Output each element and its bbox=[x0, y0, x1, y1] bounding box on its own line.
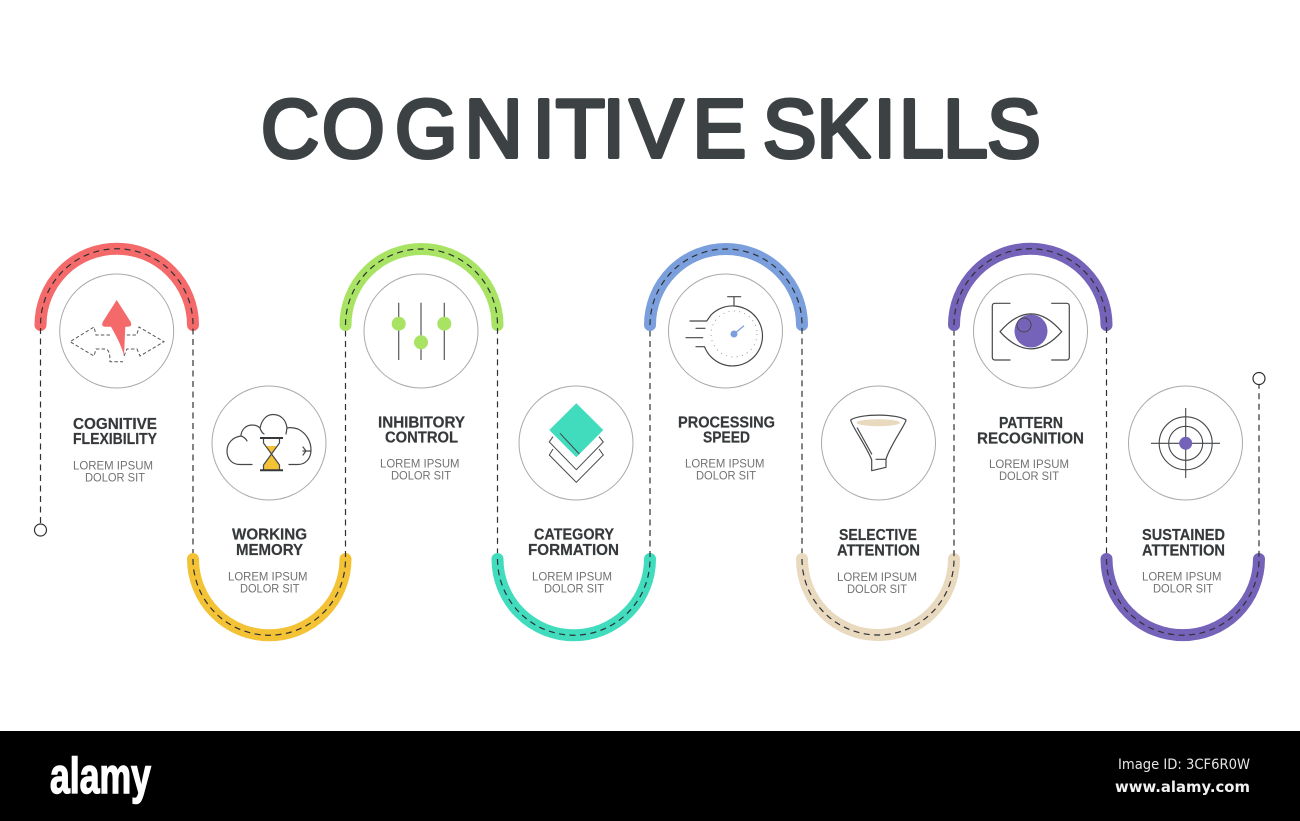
panel: working memory: DOLOR SIT bbox=[240, 582, 300, 596]
dashed path bbox=[802, 325, 954, 635]
connector arc: red bbox=[40, 249, 193, 325]
body text: LOREM IPSUM bbox=[73, 458, 153, 472]
panel: sustained attention bbox=[1106, 385, 1259, 635]
panel: inhibitory control: CONTROL bbox=[385, 430, 458, 446]
connector arc: purple bbox=[954, 249, 1106, 325]
footer bar bbox=[0, 731, 1300, 821]
icon: target bbox=[1151, 408, 1220, 478]
heading: SELECTIVE bbox=[839, 527, 917, 544]
panel: cognitive flexibility bbox=[40, 249, 193, 559]
body text: LOREM IPSUM bbox=[837, 570, 917, 584]
title: COGNITIVE SKILLS bbox=[261, 83, 1041, 175]
panel: processing speed: SPEED bbox=[703, 430, 750, 446]
icon: diverging arrows bbox=[70, 300, 164, 362]
icon: funnel bbox=[851, 415, 906, 471]
icon: cloud with hourglass bbox=[227, 414, 311, 470]
icon circle bbox=[212, 386, 326, 500]
panel: category formation: FORMATION bbox=[528, 542, 619, 559]
panel: working memory bbox=[193, 325, 346, 635]
panel: pattern recognition: RECOGNITION bbox=[977, 430, 1084, 448]
end marker bbox=[1253, 372, 1265, 384]
body text: LOREM IPSUM bbox=[380, 456, 460, 470]
panel: inhibitory control bbox=[346, 249, 498, 559]
panel: category formation: DOLOR SIT bbox=[544, 582, 605, 596]
dashed path bbox=[650, 249, 802, 559]
connector arc: purple bbox=[1106, 559, 1259, 635]
panel: pattern recognition bbox=[954, 249, 1106, 559]
footer logo: alamy bbox=[50, 748, 151, 804]
panel: cognitive flexibility: FLEXIBILITY bbox=[73, 431, 157, 448]
icon: sliders bbox=[392, 303, 451, 360]
icon circle bbox=[60, 274, 174, 388]
connector arc: blue bbox=[650, 249, 802, 325]
panel: selective attention: DOLOR SIT bbox=[847, 582, 908, 596]
body text: LOREM IPSUM bbox=[685, 456, 764, 470]
icon circle bbox=[1128, 386, 1242, 500]
dashed path bbox=[498, 325, 650, 635]
panel: cognitive flexibility: DOLOR SIT bbox=[85, 470, 146, 484]
dashed path bbox=[1106, 385, 1259, 635]
dashed path bbox=[954, 249, 1106, 559]
body text: LOREM IPSUM bbox=[989, 457, 1069, 471]
heading: PATTERN bbox=[999, 415, 1063, 432]
icon circle bbox=[668, 274, 782, 388]
dashed path bbox=[40, 249, 193, 559]
connector arc: teal bbox=[498, 559, 650, 635]
connector arc: green bbox=[346, 249, 498, 325]
body text: LOREM IPSUM bbox=[228, 570, 308, 584]
heading: CATEGORY bbox=[534, 526, 614, 544]
icon circle bbox=[974, 274, 1088, 388]
panel: processing speed: DOLOR SIT bbox=[696, 468, 757, 482]
start marker bbox=[34, 524, 46, 536]
panel: sustained attention: DOLOR SIT bbox=[1153, 582, 1214, 596]
icon circle bbox=[822, 386, 936, 500]
heading: WORKING bbox=[232, 526, 307, 544]
image id: Image ID: 3CF6R0W bbox=[1118, 757, 1250, 773]
heading: SUSTAINED bbox=[1142, 527, 1225, 544]
connector arc: beige bbox=[802, 559, 954, 635]
heading: COGNITIVE bbox=[73, 416, 157, 433]
heading: PROCESSING bbox=[678, 414, 775, 432]
icon circle bbox=[519, 386, 633, 500]
icon circle bbox=[364, 274, 478, 388]
connector arc: yellow bbox=[193, 559, 346, 635]
panel: sustained attention: ATTENTION bbox=[1142, 542, 1225, 560]
icon: stacked layers bbox=[549, 403, 603, 482]
dashed path bbox=[346, 249, 498, 559]
dashed path bbox=[193, 325, 346, 635]
panel: processing speed bbox=[650, 249, 802, 559]
panel: selective attention bbox=[802, 325, 954, 635]
icon: eye in viewfinder bbox=[992, 303, 1069, 360]
panel: inhibitory control: DOLOR SIT bbox=[391, 468, 452, 482]
heading: INHIBITORY bbox=[378, 414, 465, 432]
panel: selective attention: ATTENTION bbox=[837, 542, 920, 560]
panel: working memory: MEMORY bbox=[236, 542, 303, 559]
body text: LOREM IPSUM bbox=[1142, 570, 1222, 584]
icon: stopwatch bbox=[686, 297, 762, 366]
body text: LOREM IPSUM bbox=[532, 570, 612, 584]
panel: category formation bbox=[498, 325, 650, 635]
website: www.alamy.com bbox=[1115, 778, 1250, 796]
panel: pattern recognition: DOLOR SIT bbox=[999, 469, 1060, 483]
